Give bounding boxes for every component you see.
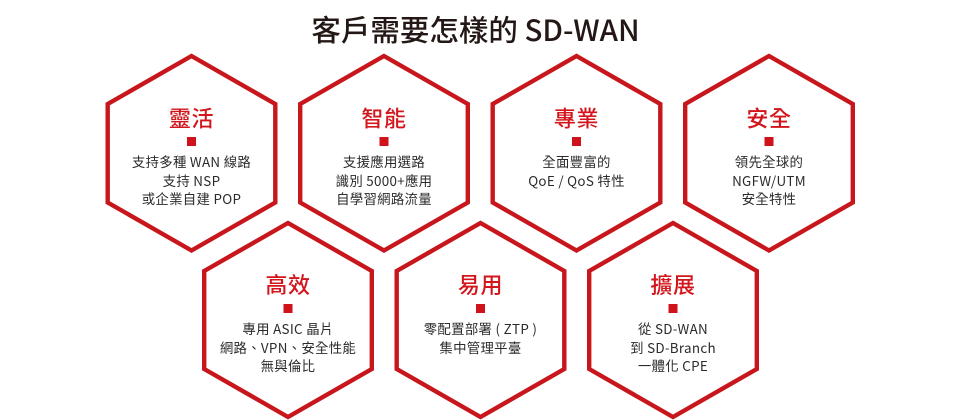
title: 客戶需要怎樣的 SD-WAN	[311, 8, 640, 50]
text block: 安全: 領先全球的	[735, 151, 803, 171]
text block: 易用: 集中管理平臺	[439, 337, 522, 357]
text block: 專業: QoE / QoS 特性	[528, 170, 625, 190]
text block: 高效: 網路、VPN、安全性能	[220, 337, 356, 357]
heading: 專業: 專業	[554, 102, 599, 134]
text block: 靈活: 支持 NSP	[163, 170, 220, 190]
text block: 靈活: 支持多種 WAN 線路	[132, 151, 251, 171]
text block: 安全: NGFW/UTM	[732, 170, 806, 190]
heading: 安全: 安全	[746, 102, 792, 134]
panel: 易用	[397, 223, 564, 417]
heading: 擴展: 擴展	[650, 268, 696, 300]
marker square	[476, 304, 485, 313]
text block: 靈活: 或企業自建 POP	[142, 188, 241, 208]
text block: 智能: 支援應用選路	[343, 151, 425, 171]
marker square	[187, 137, 196, 146]
panel: 專業	[493, 56, 660, 250]
text block: 智能: 識別 5000+應用	[336, 170, 432, 190]
heading: 高效: 高效	[265, 268, 311, 300]
text block: 高效: 無與倫比	[261, 355, 315, 375]
text block: 易用: 零配置部署 ( ZTP )	[424, 318, 537, 338]
heading: 靈活: 靈活	[169, 102, 214, 134]
text block: 智能: 自學習網路流量	[336, 188, 432, 208]
panel: 安全	[685, 56, 853, 250]
marker square	[284, 304, 292, 313]
text block: 安全: 安全特性	[742, 188, 796, 208]
panel: 靈活	[108, 56, 275, 250]
text block: 擴展: 從 SD-WAN	[638, 318, 708, 338]
marker square	[668, 304, 678, 313]
text block: 專業: 全面豐富的	[542, 151, 611, 171]
heading: 易用: 易用	[458, 268, 503, 300]
panel: 高效	[204, 223, 372, 417]
marker square	[572, 137, 581, 146]
marker square	[764, 137, 774, 146]
text block: 擴展: 到 SD-Branch	[630, 337, 716, 357]
marker square	[380, 137, 388, 146]
text block: 擴展: 一體化 CPE	[638, 355, 708, 375]
heading: 智能: 智能	[361, 102, 407, 134]
panel: 智能	[300, 56, 468, 250]
text block: 高效: 專用 ASIC 晶片	[242, 318, 334, 338]
panel: 擴展	[589, 223, 757, 417]
